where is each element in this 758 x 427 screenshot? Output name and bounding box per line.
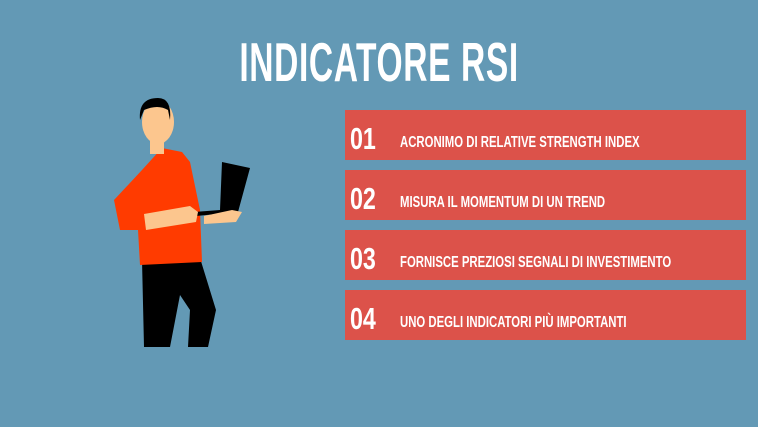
item 03: FORNISCE PREZIOSI SEGNALI DI INVESTIMENTO <box>400 254 671 271</box>
item 02: MISURA IL MOMENTUM DI UN TREND <box>400 194 605 211</box>
figure: man with laptop <box>114 98 250 347</box>
item 02: 02 <box>350 181 376 216</box>
item 04 <box>345 290 746 340</box>
item 04: 04 <box>350 301 376 336</box>
item 02 <box>345 170 746 220</box>
item 03 <box>345 230 746 280</box>
item 01: 01 <box>350 121 376 156</box>
arms <box>144 206 198 230</box>
laptop <box>194 162 250 216</box>
item 01: ACRONIMO DI RELATIVE STRENGTH INDEX <box>400 134 640 151</box>
item 01 <box>345 110 746 160</box>
head <box>142 100 174 144</box>
pants <box>142 258 216 347</box>
title: INDICATORE RSI <box>239 31 519 93</box>
shirt <box>114 148 202 265</box>
item 03: 03 <box>350 241 376 276</box>
item 04: UNO DEGLI INDICATORI PIÙ IMPORTANTI <box>400 314 627 331</box>
